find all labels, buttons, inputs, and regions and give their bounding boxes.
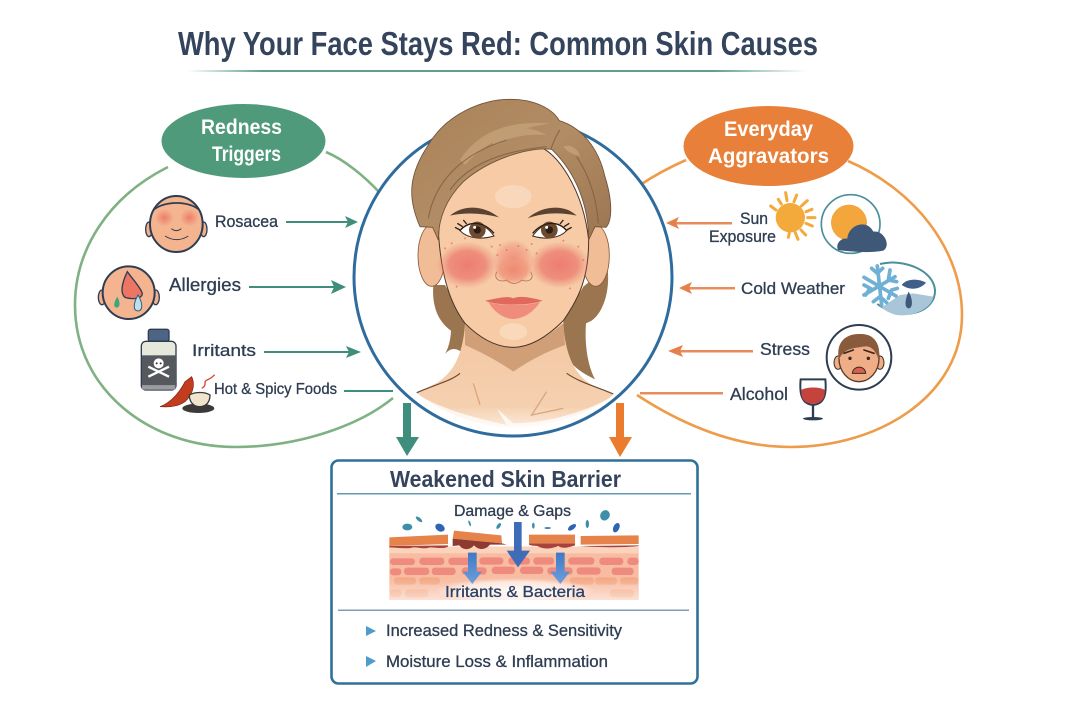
- nose: [494, 256, 533, 284]
- circle: portrait: [354, 99, 672, 436]
- label: irritants and bacteria: Irritants & Bacteria: [445, 584, 585, 601]
- label: hot and spicy foods: Hot & Spicy Foods: [214, 381, 337, 398]
- chin shadow: [465, 323, 565, 372]
- heading pill: redness triggers: Redness: [201, 116, 282, 139]
- label: alcohol: Alcohol: [730, 384, 788, 404]
- panel: redness triggers: [75, 104, 393, 447]
- label: sun exposure: Exposure: [709, 228, 776, 246]
- arrow: orange down to barrier: [609, 403, 632, 457]
- arrow: allergies: [249, 280, 346, 294]
- icon: sun and cloud badge: [821, 195, 887, 253]
- eyes: [460, 224, 494, 238]
- arrow: sun exposure: [666, 217, 732, 229]
- panel: everyday aggravators: [637, 106, 962, 447]
- green outline: [75, 152, 393, 447]
- label: sun exposure: Sun: [740, 210, 768, 228]
- lower rule: [338, 610, 689, 611]
- heading pill: everyday aggravators: Everyday: [724, 118, 813, 141]
- label: allergies: Allergies: [169, 275, 241, 295]
- back hair: [433, 267, 608, 379]
- lips: [488, 302, 540, 319]
- bullet: moisture loss: Moisture Loss & Inflammation: [386, 653, 608, 671]
- arrow: cold weather: [679, 282, 735, 294]
- label: cold weather: Cold Weather: [741, 279, 845, 298]
- icon: irritant bottle: [141, 329, 176, 390]
- heading pill: everyday aggravators: Aggravators: [708, 145, 829, 168]
- cheek redness: [437, 242, 498, 288]
- heading pill: redness triggers: [162, 104, 326, 178]
- panel frame: [332, 460, 698, 684]
- title underline: [188, 70, 806, 72]
- heading pill: everyday aggravators: [684, 106, 854, 186]
- line: hot and spicy foods: [344, 390, 393, 392]
- icon: sun: [771, 193, 815, 239]
- label: stress: Stress: [760, 339, 810, 359]
- icon: chili and hot food: [160, 375, 215, 413]
- line: alcohol: [640, 392, 723, 394]
- heading rule: [337, 493, 691, 494]
- shoulders and neck: [417, 323, 613, 427]
- icon: allergies face: [98, 266, 159, 319]
- arrow: irritants: [264, 346, 361, 358]
- arrow: green down to barrier: [396, 403, 419, 456]
- heading pill: redness triggers: Triggers: [212, 143, 281, 166]
- icon: wine glass: [800, 379, 826, 420]
- label: damage and gaps: Damage & Gaps: [454, 503, 571, 520]
- portrait ring: [354, 118, 672, 436]
- face: [439, 146, 589, 347]
- arrow: stress: [668, 345, 753, 357]
- orange outline: [637, 160, 962, 447]
- hair: [412, 99, 611, 240]
- label: sun exposure: [709, 210, 776, 246]
- skin cross-section: [389, 508, 639, 603]
- title: Why Your Face Stays Red: Common Skin Causes: [178, 25, 818, 62]
- bullet: increased redness: Increased Redness & Sensitivity: [386, 622, 623, 640]
- icon: snowflake badge: [864, 263, 935, 315]
- label: rosacea: Rosacea: [215, 213, 279, 231]
- ears: [418, 225, 445, 286]
- portrait of woman with red cheeks: [412, 99, 615, 429]
- heading: Weakened Skin Barrier: [390, 466, 621, 492]
- icon: stressed face badge: [827, 325, 891, 390]
- panel: weakened skin barrier: [332, 460, 698, 684]
- icon: rosacea face: [146, 196, 207, 252]
- label: irritants: Irritants: [192, 341, 256, 360]
- eyebrows: [450, 208, 499, 217]
- arrow: rosacea: [286, 216, 358, 228]
